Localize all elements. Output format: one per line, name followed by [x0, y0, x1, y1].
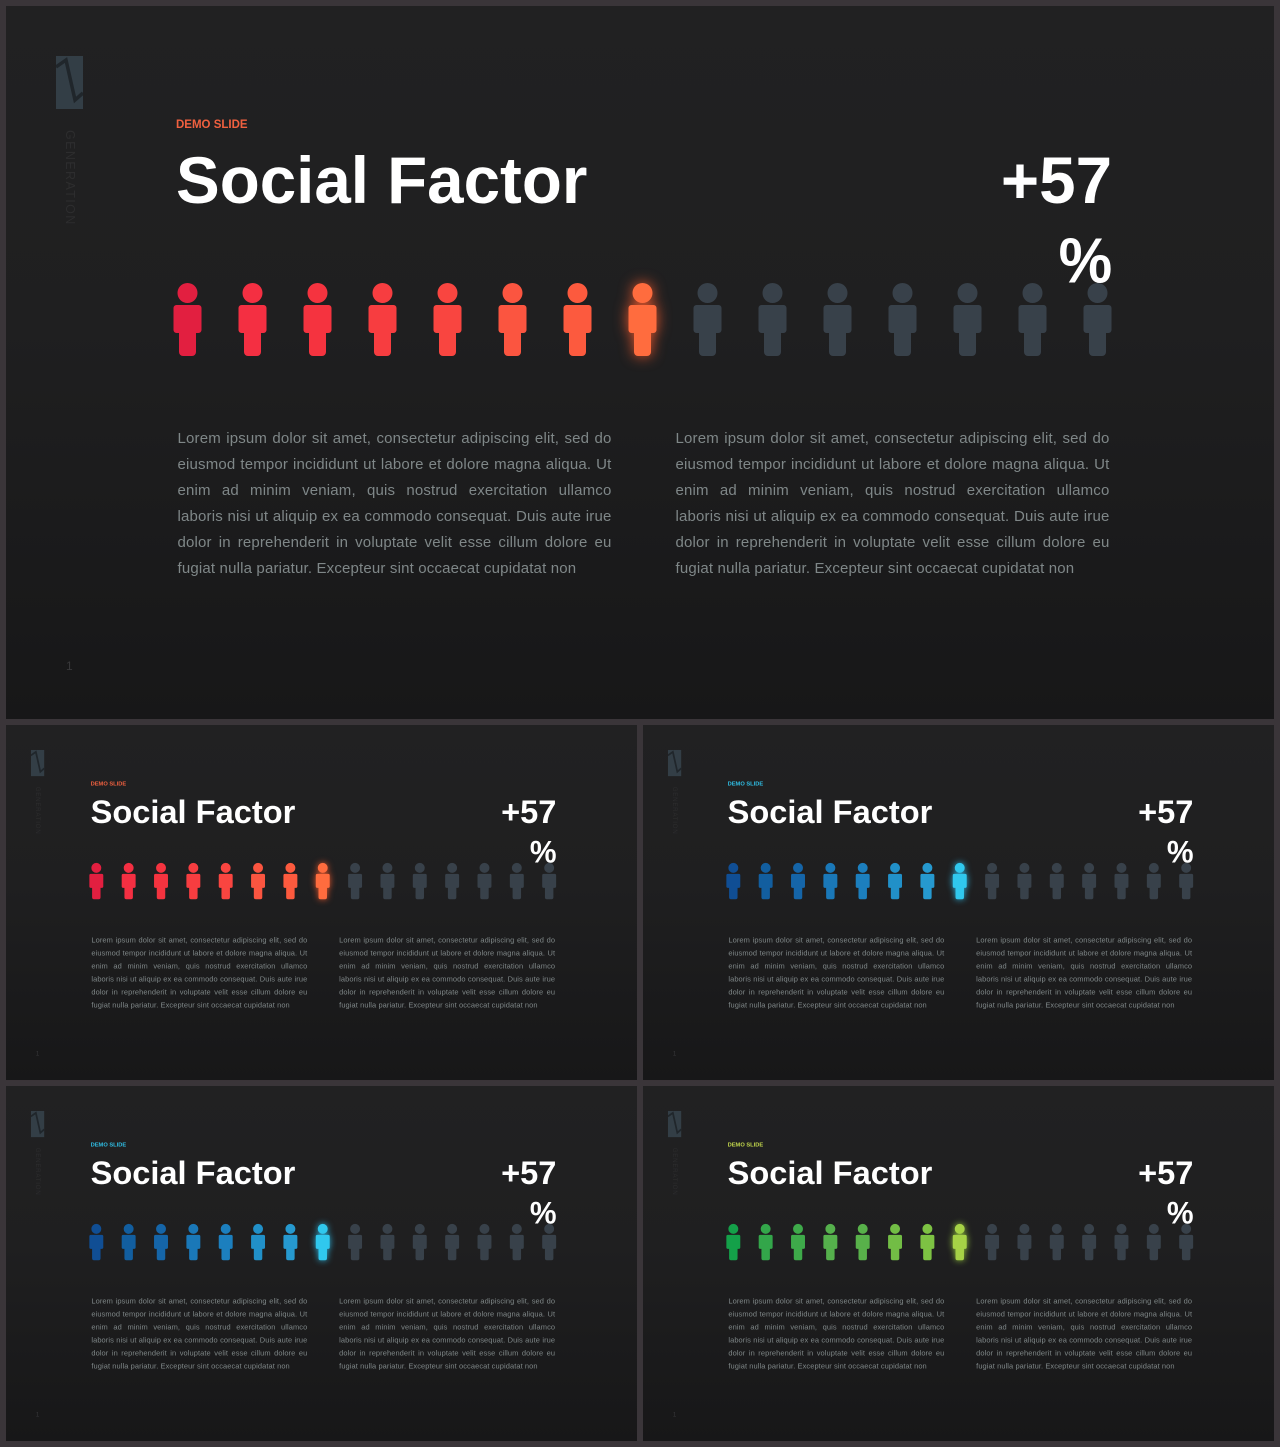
page number: 1	[36, 1050, 39, 1057]
title: Social Factor	[176, 144, 587, 216]
text block: left column: dolor in reprehenderit in voluptate velit esse cillum dolore eu	[91, 1349, 307, 1357]
text block: left column: fugiat nulla pariatur. Excepteur sint occaecat cupidatat non	[728, 1362, 927, 1370]
text block: right column: dolor in reprehenderit in voluptate velit esse cillum dolore eu	[339, 1349, 555, 1357]
statistic: %	[530, 1195, 556, 1230]
text block: right column: dolor in reprehenderit in voluptate velit esse cillum dolore eu	[976, 1349, 1192, 1357]
statistic: %	[1167, 834, 1193, 869]
title: Social Factor	[91, 1154, 295, 1191]
brand label: GENERATION	[34, 1148, 41, 1195]
text block: right column: dolor in reprehenderit in voluptate velit esse cillum dolore eu	[339, 988, 555, 996]
text block: left column: enim ad minim veniam, quis nostrud exercitation ullamco	[728, 962, 944, 970]
text block: left column: laboris nisi ut aliquip ex ea commodo consequat. Duis aute irue	[91, 975, 307, 983]
pictogram row: 8 of 15 people	[89, 1219, 556, 1266]
text block: left column: Lorem ipsum dolor sit amet, consectetur adipiscing elit, sed do	[728, 936, 944, 945]
statistic: +57	[501, 793, 556, 830]
eyebrow label: DEMO SLIDE	[728, 781, 763, 787]
statistic: +57	[1138, 793, 1193, 830]
text block: left column: fugiat nulla pariatur. Excepteur sint occaecat cupidatat non	[91, 1001, 290, 1009]
statistic: +57	[1138, 1154, 1193, 1191]
text block: left column: enim ad minim veniam, quis nostrud exercitation ullamco	[91, 1323, 307, 1331]
text block: right column: fugiat nulla pariatur. Excepteur sint occaecat cupidatat non	[339, 1001, 538, 1009]
text block: left column	[728, 936, 944, 1009]
brand label: GENERATION	[34, 787, 41, 834]
text block: left column: fugiat nulla pariatur. Excepteur sint occaecat cupidatat non	[728, 1001, 927, 1009]
text block: left column: eiusmod tempor incididunt ut labore et dolore magna aliqua. Ut	[91, 949, 307, 958]
text block: left column: dolor in reprehenderit in voluptate velit esse cillum dolore eu	[91, 988, 307, 996]
text block: right column: eiusmod tempor incididunt ut labore et dolore magna aliqua. Ut	[339, 1310, 555, 1319]
text block: right column: Lorem ipsum dolor sit amet, consectetur adipiscing elit, sed do	[339, 936, 555, 945]
text block: right column	[676, 430, 1110, 577]
icon: logo	[31, 750, 44, 776]
text block: left column	[728, 1297, 944, 1370]
eyebrow label: DEMO SLIDE	[91, 781, 126, 787]
text block: left column: fugiat nulla pariatur. Excepteur sint occaecat cupidatat non	[91, 1362, 290, 1370]
eyebrow label: DEMO SLIDE	[728, 1142, 763, 1148]
text block: left column: Lorem ipsum dolor sit amet, consectetur adipiscing elit, sed do	[91, 936, 307, 945]
text block: left column	[91, 936, 308, 1009]
page number: 1	[36, 1411, 39, 1418]
text block: right column: laboris nisi ut aliquip ex ea commodo consequat. Duis aute irue	[339, 1336, 555, 1344]
pictogram row: 8 of 15 people	[89, 858, 556, 904]
pictogram row: 8 of 15 people	[726, 858, 1194, 904]
statistic	[1001, 144, 1112, 296]
text block: right column: eiusmod tempor incididunt ut labore et dolore magna aliqua. Ut	[676, 456, 1110, 473]
text block: left column: laboris nisi ut aliquip ex ea commodo consequat. Duis aute irue	[728, 1336, 944, 1344]
text block: right column: fugiat nulla pariatur. Excepteur sint occaecat cupidatat non	[976, 1001, 1175, 1009]
text block: right column	[339, 936, 555, 1009]
text block: right column: fugiat nulla pariatur. Excepteur sint occaecat cupidatat non	[339, 1362, 538, 1370]
icon: logo	[56, 56, 83, 109]
brand label: GENERATION	[63, 130, 77, 226]
text block: left column: Lorem ipsum dolor sit amet, consectetur adipiscing elit, sed do	[91, 1297, 307, 1306]
text block: left column: fugiat nulla pariatur. Excepteur sint occaecat cupidatat non	[178, 560, 576, 577]
text block: right column: enim ad minim veniam, quis nostrud exercitation ullamco	[976, 962, 1192, 970]
text block: left column: Lorem ipsum dolor sit amet, consectetur adipiscing elit, sed do	[728, 1297, 944, 1306]
statistic: +57	[501, 1154, 556, 1191]
page number: 1	[66, 659, 73, 673]
text block: right column: Lorem ipsum dolor sit amet, consectetur adipiscing elit, sed do	[976, 936, 1192, 945]
page number: 1	[673, 1050, 676, 1057]
statistic: %	[1167, 1195, 1193, 1230]
text block: right column: eiusmod tempor incididunt ut labore et dolore magna aliqua. Ut	[339, 949, 555, 958]
text block: left column: laboris nisi ut aliquip ex ea commodo consequat. Duis aute irue	[728, 975, 944, 983]
text block: right column: Lorem ipsum dolor sit amet, consectetur adipiscing elit, sed do	[676, 430, 1110, 447]
text block: right column: laboris nisi ut aliquip ex ea commodo consequat. Duis aute irue	[976, 975, 1192, 983]
icon: logo	[668, 750, 682, 776]
text block: right column: laboris nisi ut aliquip ex ea commodo consequat. Duis aute irue	[676, 508, 1110, 525]
text block: left column: enim ad minim veniam, quis nostrud exercitation ullamco	[728, 1323, 944, 1331]
statistic: %	[530, 834, 556, 869]
text block: right column: laboris nisi ut aliquip ex ea commodo consequat. Duis aute irue	[339, 975, 555, 983]
statistic	[1138, 1154, 1193, 1230]
text block: left column: eiusmod tempor incididunt ut labore et dolore magna aliqua. Ut	[728, 1310, 944, 1319]
statistic	[1138, 793, 1193, 869]
text block: left column: eiusmod tempor incididunt ut labore et dolore magna aliqua. Ut	[178, 456, 612, 473]
text block: left column: eiusmod tempor incididunt ut labore et dolore magna aliqua. Ut	[91, 1310, 307, 1319]
text block: right column: enim ad minim veniam, quis nostrud exercitation ullamco	[339, 962, 555, 970]
text block: left column: eiusmod tempor incididunt ut labore et dolore magna aliqua. Ut	[728, 949, 944, 958]
pictogram row: 8 of 15 people	[174, 274, 1112, 366]
title: Social Factor	[728, 1154, 932, 1191]
text block: left column: enim ad minim veniam, quis nostrud exercitation ullamco	[178, 482, 612, 499]
panel: small slide, blue top	[643, 725, 1274, 1080]
text block: left column: enim ad minim veniam, quis nostrud exercitation ullamco	[91, 962, 307, 970]
text block: left column: Lorem ipsum dolor sit amet, consectetur adipiscing elit, sed do	[178, 430, 612, 447]
text block: right column: dolor in reprehenderit in voluptate velit esse cillum dolore eu	[976, 988, 1192, 996]
panel: main slide, red	[6, 6, 1274, 719]
text block: left column: laboris nisi ut aliquip ex ea commodo consequat. Duis aute irue	[91, 1336, 307, 1344]
text block: right column: enim ad minim veniam, quis nostrud exercitation ullamco	[676, 482, 1110, 499]
text block: right column: enim ad minim veniam, quis nostrud exercitation ullamco	[339, 1323, 555, 1331]
text block: right column: fugiat nulla pariatur. Excepteur sint occaecat cupidatat non	[976, 1362, 1175, 1370]
text block: right column: fugiat nulla pariatur. Excepteur sint occaecat cupidatat non	[676, 560, 1074, 577]
panel: small slide, green	[643, 1086, 1274, 1441]
title: Social Factor	[91, 793, 295, 830]
text block: right column: enim ad minim veniam, quis nostrud exercitation ullamco	[976, 1323, 1192, 1331]
text block: right column: eiusmod tempor incididunt ut labore et dolore magna aliqua. Ut	[976, 1310, 1192, 1319]
eyebrow label: DEMO SLIDE	[176, 119, 248, 131]
text block: right column	[976, 1297, 1192, 1370]
brand label: GENERATION	[671, 1148, 678, 1195]
text block: left column: laboris nisi ut aliquip ex ea commodo consequat. Duis aute irue	[178, 508, 612, 525]
statistic	[501, 1154, 556, 1230]
panel: small slide, blue bottom	[6, 1086, 637, 1441]
statistic	[501, 793, 556, 869]
text block: right column: laboris nisi ut aliquip ex ea commodo consequat. Duis aute irue	[976, 1336, 1192, 1344]
text block: right column: Lorem ipsum dolor sit amet, consectetur adipiscing elit, sed do	[339, 1297, 555, 1306]
text block: right column	[339, 1297, 555, 1370]
text block: left column: dolor in reprehenderit in voluptate velit esse cillum dolore eu	[728, 988, 944, 996]
text block: left column: dolor in reprehenderit in voluptate velit esse cillum dolore eu	[728, 1349, 944, 1357]
text block: right column: dolor in reprehenderit in voluptate velit esse cillum dolore eu	[676, 534, 1110, 551]
icon: logo	[668, 1111, 682, 1138]
icon: logo	[31, 1111, 44, 1138]
text block: right column: Lorem ipsum dolor sit amet, consectetur adipiscing elit, sed do	[976, 1297, 1192, 1306]
eyebrow label: DEMO SLIDE	[91, 1142, 126, 1148]
statistic: %	[1058, 225, 1112, 296]
title: Social Factor	[728, 793, 932, 830]
panel: small slide, red	[6, 725, 637, 1080]
text block: left column	[178, 430, 612, 577]
text block: left column: dolor in reprehenderit in voluptate velit esse cillum dolore eu	[178, 534, 612, 551]
statistic: +57	[1001, 144, 1112, 216]
pictogram row: 8 of 15 people	[726, 1220, 1194, 1265]
brand label: GENERATION	[671, 787, 678, 834]
text block: left column	[91, 1297, 308, 1370]
text block: right column: eiusmod tempor incididunt ut labore et dolore magna aliqua. Ut	[976, 949, 1192, 958]
text block: right column	[976, 936, 1192, 1009]
page number: 1	[673, 1411, 676, 1418]
